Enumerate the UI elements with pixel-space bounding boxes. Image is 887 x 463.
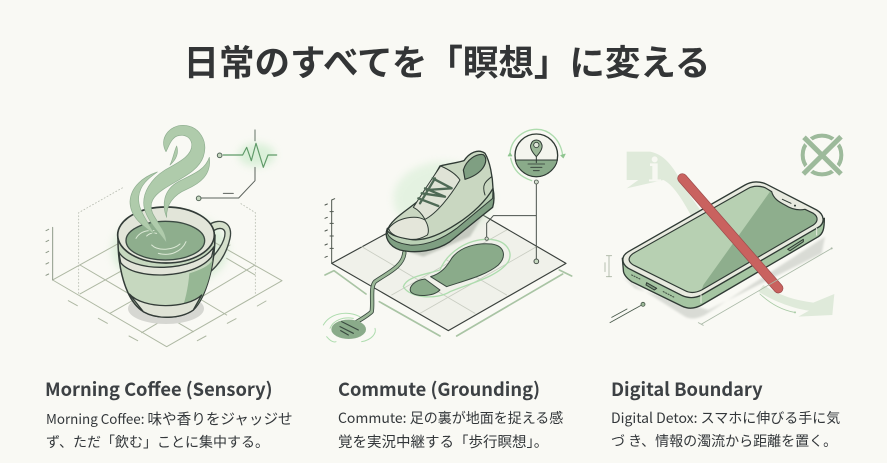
- text: digital detox: づ き、情報の濁流から距離を置く。: [611, 431, 837, 451]
- measure lines: [698, 248, 832, 325]
- green brackets: [325, 270, 572, 336]
- text: commute: [338, 408, 563, 452]
- isometric grid: [53, 242, 282, 347]
- shoe glow and shadow: [393, 162, 493, 235]
- information flow arrow out: [758, 285, 834, 317]
- pulse signal: [238, 143, 275, 167]
- illustration: shoe and footprint: [323, 129, 572, 342]
- axis: [325, 199, 335, 263]
- rim: [118, 207, 214, 263]
- laces: [418, 178, 452, 206]
- text: morning coffee: [46, 408, 293, 452]
- text: morning coffee: ず、ただ「飲む」ことに集中する。: [46, 432, 269, 452]
- crossed circle icon: [803, 136, 841, 174]
- ground symbol: [331, 320, 366, 339]
- connector lines: [487, 183, 536, 260]
- illustration: smartphone with barrier: [605, 136, 841, 325]
- title: 日常のすべてを「瞑想」に変える: [184, 35, 710, 86]
- footprint: [403, 239, 510, 297]
- red barrier: [682, 178, 778, 288]
- shoe upper: [387, 151, 493, 240]
- text: morning coffee: Morning Coffee: 味や香りをジャッジせ: [46, 408, 293, 429]
- information flow arrow in: [627, 152, 705, 217]
- text: commute: 覚を実況中継する「歩行瞑想」。: [338, 431, 548, 452]
- location badge icon: [515, 134, 558, 177]
- text: digital detox: [611, 408, 840, 451]
- cup shadow: [128, 293, 204, 324]
- heading: commute: Commute (Grounding): [338, 376, 540, 402]
- phone body: [622, 218, 824, 308]
- illustration: coffee cup: [46, 125, 282, 347]
- cord to ground: [352, 253, 404, 325]
- screen: [629, 186, 817, 293]
- phone shadow: [622, 237, 825, 318]
- glow: [112, 212, 228, 288]
- heading: morning coffee: Morning Coffee (Sensory): [45, 376, 273, 402]
- text: commute: Commute: 足の裏が地面を捉える感: [338, 408, 563, 428]
- heading: digital boundary: Digital Boundary: [611, 376, 763, 402]
- handle: [205, 221, 231, 276]
- cup body: [118, 235, 215, 317]
- floor plane: [332, 213, 566, 331]
- info glyph: [649, 156, 661, 181]
- shoe sole: [386, 188, 494, 252]
- steam: [144, 125, 205, 243]
- text: digital detox: Digital Detox: スマホに伸びる手に気: [611, 408, 840, 428]
- ripples: [136, 231, 186, 254]
- ports and buttons: [646, 283, 657, 290]
